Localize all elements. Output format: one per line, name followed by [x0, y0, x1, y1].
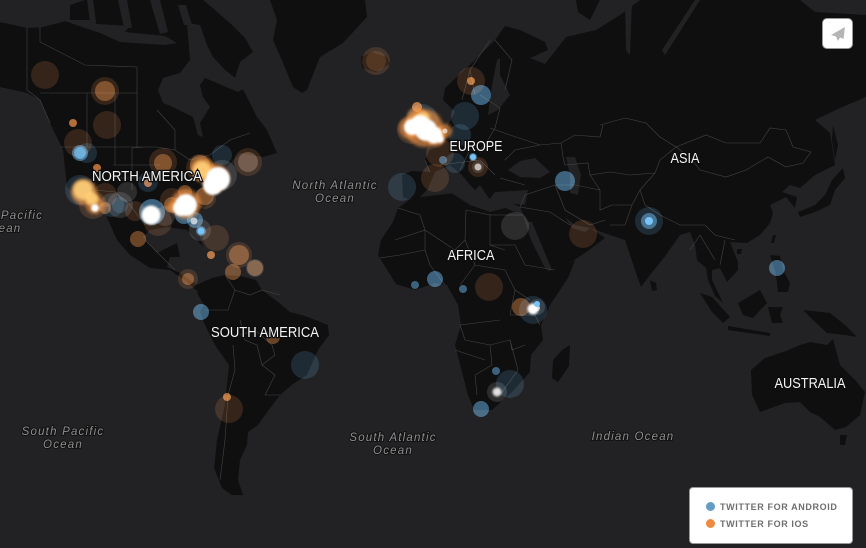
taiwan hainan [737, 235, 776, 254]
sakhalin [832, 125, 838, 160]
madagascar [552, 345, 570, 382]
icon: paper plane [831, 27, 845, 41]
iceland [361, 52, 390, 72]
philippines [770, 255, 790, 292]
hot spots [71, 107, 653, 396]
label: south pacific ocean: South Pacific [22, 426, 104, 438]
sri lanka [650, 280, 657, 291]
data circles: twitter for ios, solid [69, 77, 475, 401]
label: south atlantic ocean: Ocean [373, 445, 413, 457]
ocean labels [0, 180, 674, 457]
label: south pacific ocean: Ocean [43, 439, 83, 451]
orange halo glow [71, 107, 452, 219]
data circles: grey overlap [107, 152, 545, 402]
legend item: twitter for android: TWITTER FOR ANDROID [720, 502, 837, 512]
japan [798, 168, 845, 217]
data circles: twitter for ios, medium [95, 81, 530, 344]
legend item: twitter for ios: TWITTER FOR IOS [720, 519, 809, 529]
legend [690, 488, 852, 543]
eurasia [402, 0, 866, 303]
label: north atlantic ocean: North Atlantic [292, 180, 378, 192]
label: north america: NORTH AMERICA [92, 168, 202, 185]
label: south america: SOUTH AMERICA [211, 324, 319, 341]
inland seas [62, 0, 700, 271]
label: asia: ASIA [670, 150, 700, 167]
label: indian ocean: Indian Ocean [592, 431, 674, 443]
south america [197, 275, 329, 495]
north and central america [0, 0, 277, 291]
borneo sulawesi [738, 290, 783, 323]
label: north atlantic ocean: Ocean [315, 193, 355, 205]
data circles: twitter for android, low opacity [65, 102, 663, 398]
label: south atlantic ocean: South Atlantic [349, 432, 437, 444]
new guinea [803, 310, 857, 337]
label: europe: EUROPE [450, 138, 502, 155]
share button [823, 19, 852, 48]
pale points [190, 128, 540, 311]
label: australia: AUSTRALIA [774, 375, 846, 392]
data circles: twitter for ios, low opacity [31, 47, 597, 423]
label: north pacific ocean: Pacific [1, 210, 43, 222]
novaya zemlya [576, 0, 600, 20]
data circles: twitter for android, medium [72, 85, 785, 417]
label: africa: AFRICA [448, 247, 494, 264]
white core [91, 115, 538, 396]
bright blue points [74, 147, 653, 307]
sumatra and java [700, 293, 770, 336]
greenland [270, 0, 367, 93]
continent labels [92, 138, 846, 392]
australia [751, 339, 865, 445]
africa [378, 192, 575, 410]
yellow glow [73, 112, 430, 206]
british isles [402, 105, 440, 142]
borders [27, 27, 811, 480]
